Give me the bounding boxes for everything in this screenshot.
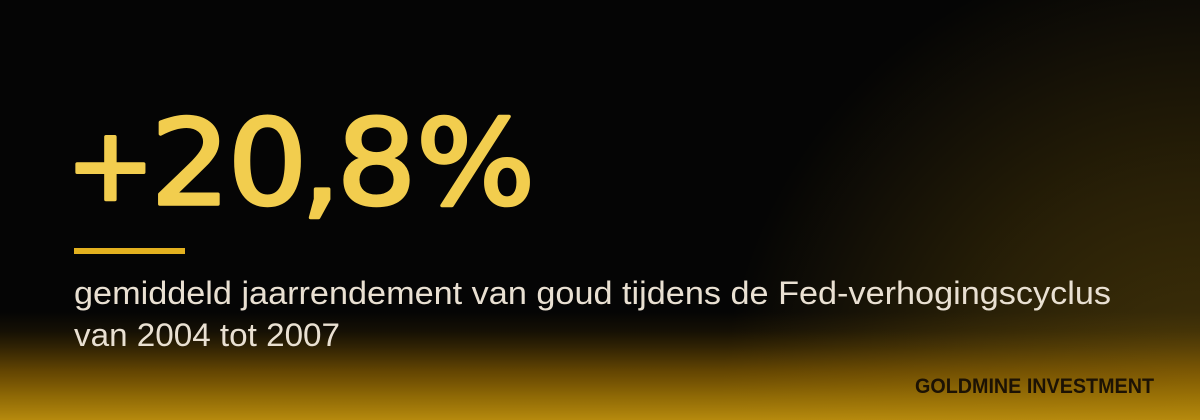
brand label: GOLDMINE INVESTMENT bbox=[915, 375, 1154, 398]
accent rule bbox=[74, 248, 185, 254]
headline figure: % bbox=[416, 94, 535, 232]
headline figure: + bbox=[66, 107, 155, 224]
headline figure: 0 bbox=[228, 94, 307, 232]
description bbox=[74, 275, 1111, 353]
headline figure: 2 bbox=[151, 94, 230, 232]
headline figure: 8 bbox=[337, 94, 416, 232]
description: gemiddeld jaarrendement van goud tijdens de Fed-verhogingscyclus bbox=[74, 275, 1111, 311]
description: van 2004 tot 2007 bbox=[74, 317, 340, 353]
headline figure: , bbox=[301, 94, 341, 232]
